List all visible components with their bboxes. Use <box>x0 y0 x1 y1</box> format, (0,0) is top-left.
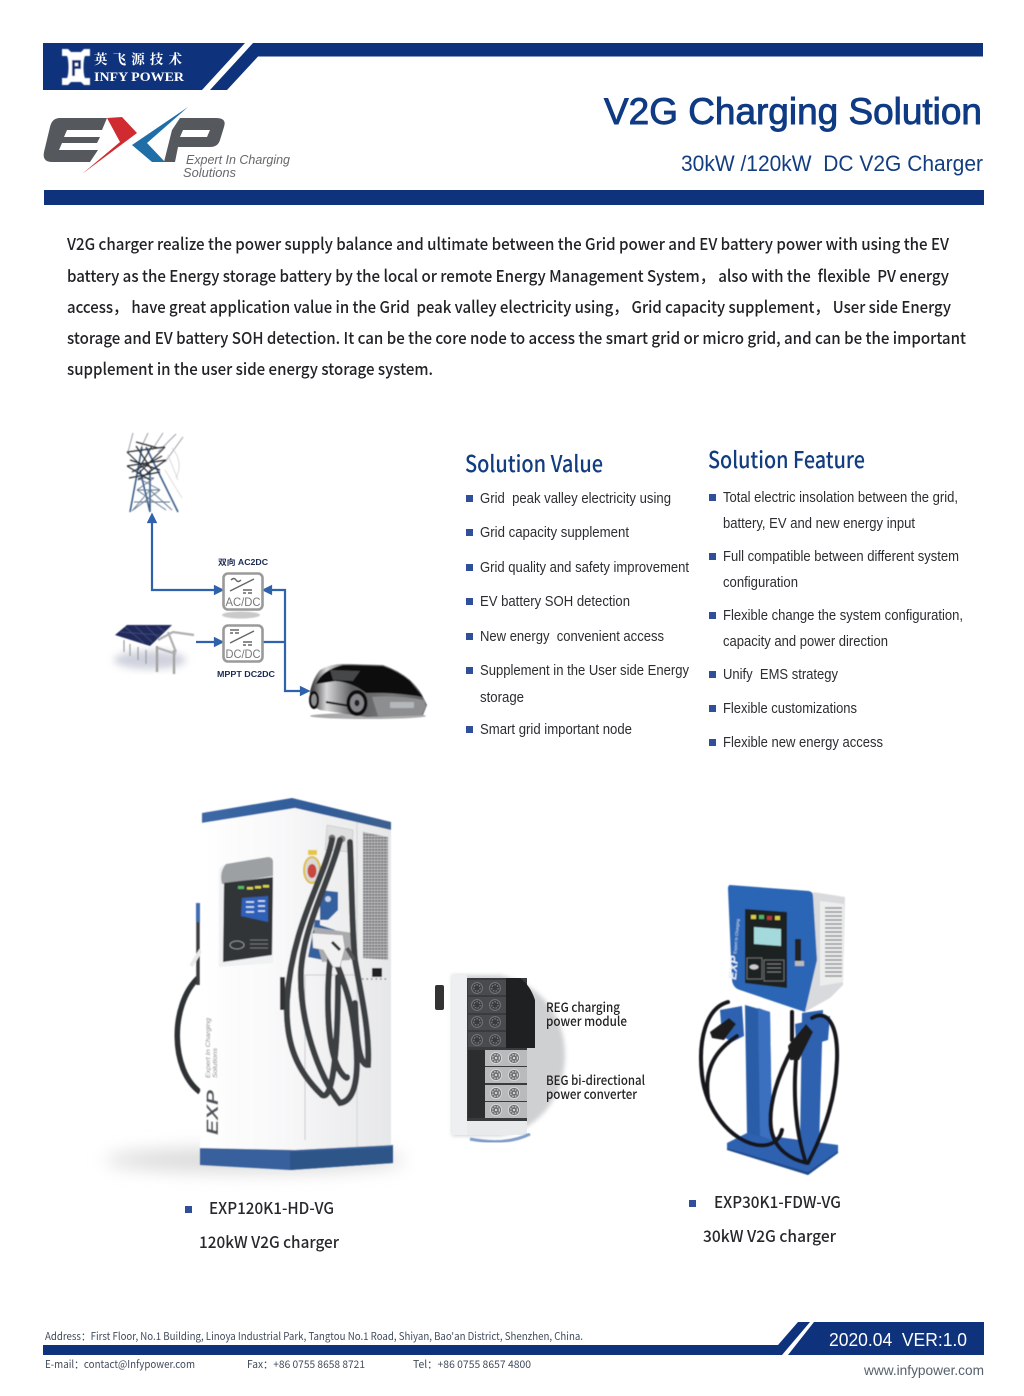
icon: AC/DC converter <box>222 574 262 618</box>
bullets list: Flexible change the system configuration, <box>723 608 963 624</box>
label: BEG converter: power converter <box>546 1084 638 1103</box>
label: BEG converter: BEG bi-directional <box>546 1070 645 1089</box>
cabinet branding: EXP <box>727 955 741 980</box>
title: V2G Charging Solution <box>604 91 982 132</box>
heading: Solution Value <box>465 445 603 479</box>
intro paragraph: battery as the Energy storage battery by the local or remote Energy Management System， also with the flexible PV energy <box>67 263 949 287</box>
email: E-mail：contact@Infypower.com <box>45 1357 195 1372</box>
caption: EXP30K1 <box>689 1189 841 1247</box>
subtitle: 30kW /120kW DC V2G Charger <box>681 151 983 176</box>
cabinet branding: Expert In Charging <box>732 919 740 954</box>
illustration: 30kW charger <box>701 885 845 1175</box>
side branding: EXP <box>203 1089 222 1135</box>
caption: EXP120K1: 120kW V2G charger <box>199 1229 339 1253</box>
caption: EXP120K1 <box>185 1195 339 1253</box>
control panel <box>223 877 273 962</box>
bullets list: Smart grid important node <box>480 722 632 738</box>
bullets list: EV battery SOH detection <box>480 594 630 610</box>
bullets list: Flexible customizations <box>723 701 857 717</box>
label: REG module: power module <box>546 1011 627 1030</box>
bullets list: Full compatible between different system <box>723 549 959 565</box>
side branding: Expert In Charging <box>205 1018 212 1078</box>
bullets list <box>466 491 690 738</box>
cabinet branding <box>727 918 744 980</box>
bullets list: Total electric insolation between the grid, <box>723 490 958 506</box>
EXP logo: Expert In Charging <box>186 152 291 167</box>
bullets list: Grid capacity supplement <box>480 525 629 541</box>
base <box>200 1145 393 1170</box>
cables <box>287 840 368 1103</box>
icon: Infy Power logo <box>62 49 90 85</box>
header rule <box>44 190 984 205</box>
bullets list: Supplement in the User side Energy <box>480 663 690 679</box>
bullets list: Grid peak valley electricity using <box>480 491 671 507</box>
arrow: converter to grid <box>148 515 222 594</box>
lower converters <box>468 1050 527 1118</box>
screen recess <box>219 857 273 967</box>
lock <box>795 939 801 963</box>
icon: DC/DC converter: DC/DC <box>226 647 261 661</box>
illustration: power module rack <box>435 975 565 1142</box>
icon: DC/DC converter <box>224 626 262 662</box>
caption: EXP30K1: 30kW V2G charger <box>703 1223 836 1247</box>
label: MPPT DC2DC: MPPT DC2DC <box>217 670 275 679</box>
holster <box>308 890 338 960</box>
base plate <box>727 1133 838 1175</box>
EXP logo <box>44 107 291 180</box>
address: Address：First Floor, No.1 Building, Linoya Industrial Park, Tangtou No.1 Road, Shiyan, Bao'an District, Shenzhen, China. <box>45 1329 583 1344</box>
arrow: bus to AC/DC and car <box>263 586 308 694</box>
intro paragraph: storage and EV battery SOH detection. It can be the core node to access the smart grid or micro grid, and can be the important <box>67 325 966 349</box>
cable port <box>325 825 353 852</box>
intro paragraph <box>66 231 966 380</box>
illustration: 120kW charger <box>105 798 405 1172</box>
version box: 2020.04 VER:1.0 <box>829 1330 967 1350</box>
intro paragraph: supplement in the user side energy storage system. <box>67 356 433 380</box>
brand name: INFY POWER <box>94 69 185 84</box>
header banner <box>43 43 983 90</box>
brand name: 英飞源技术 <box>94 48 182 68</box>
posts <box>745 1005 772 1140</box>
website: www.infypower.com <box>863 1362 984 1378</box>
top cap <box>202 798 391 830</box>
label: BEG converter <box>546 1070 645 1103</box>
vent <box>363 832 388 960</box>
holsters <box>720 1006 744 1042</box>
bullets list <box>709 490 963 751</box>
caption: EXP30K1: EXP30K1-FDW-VG <box>714 1189 841 1213</box>
label: REG module <box>546 997 627 1030</box>
caption: EXP120K1: EXP120K1-HD-VG <box>209 1195 334 1219</box>
version box <box>788 1322 984 1355</box>
icon: solar panel <box>114 625 194 674</box>
cabinet <box>805 892 845 1012</box>
footer band <box>43 1322 810 1355</box>
upper modules <box>468 980 506 1047</box>
cabinet body <box>200 808 295 1150</box>
bullets list: capacity and power direction <box>723 634 888 650</box>
label: bidirectional AC2DC: 双向 AC2DC <box>218 557 268 567</box>
bullets list: configuration <box>723 575 798 591</box>
bullets list: battery, EV and new energy input <box>723 516 915 532</box>
arrow: solar to DC/DC <box>196 638 222 646</box>
panel: Solution Feature <box>708 441 963 751</box>
bullets list: storage <box>480 690 524 706</box>
heading: Solution Feature <box>708 441 865 475</box>
panel: Solution Value <box>465 445 690 738</box>
emergency button <box>304 857 320 883</box>
telephone: Tel：+86 0755 8657 4800 <box>413 1357 531 1372</box>
bullets list: New energy convenient access <box>480 629 664 645</box>
system diagram <box>114 433 427 719</box>
brand name <box>94 48 185 84</box>
intro paragraph: V2G charger realize the power supply balance and ultimate between the Grid power and EV battery power with using the EV <box>66 231 949 255</box>
label: REG module: REG charging <box>546 997 620 1016</box>
icon: AC/DC converter: AC/DC <box>226 595 261 609</box>
icon: pylon <box>127 433 183 512</box>
icon: electric car <box>309 664 427 719</box>
bullets list: Flexible new energy access <box>723 735 883 751</box>
connectors <box>312 933 345 967</box>
footer <box>43 1322 984 1378</box>
EXP logo: Solutions <box>183 165 236 180</box>
side branding <box>203 1018 222 1135</box>
intro paragraph: access， have great application value in the Grid peak valley electricity using， Grid capacity supplement， User side Energy <box>67 294 951 318</box>
side branding: Solutions <box>212 1047 219 1078</box>
bullets list: Unify EMS strategy <box>723 667 839 683</box>
fax: Fax：+86 0755 8658 8721 <box>247 1357 365 1372</box>
front panel <box>745 909 787 988</box>
cables <box>701 1002 837 1163</box>
bullets list: Grid quality and safety improvement <box>480 560 689 576</box>
left cable <box>177 978 200 1092</box>
